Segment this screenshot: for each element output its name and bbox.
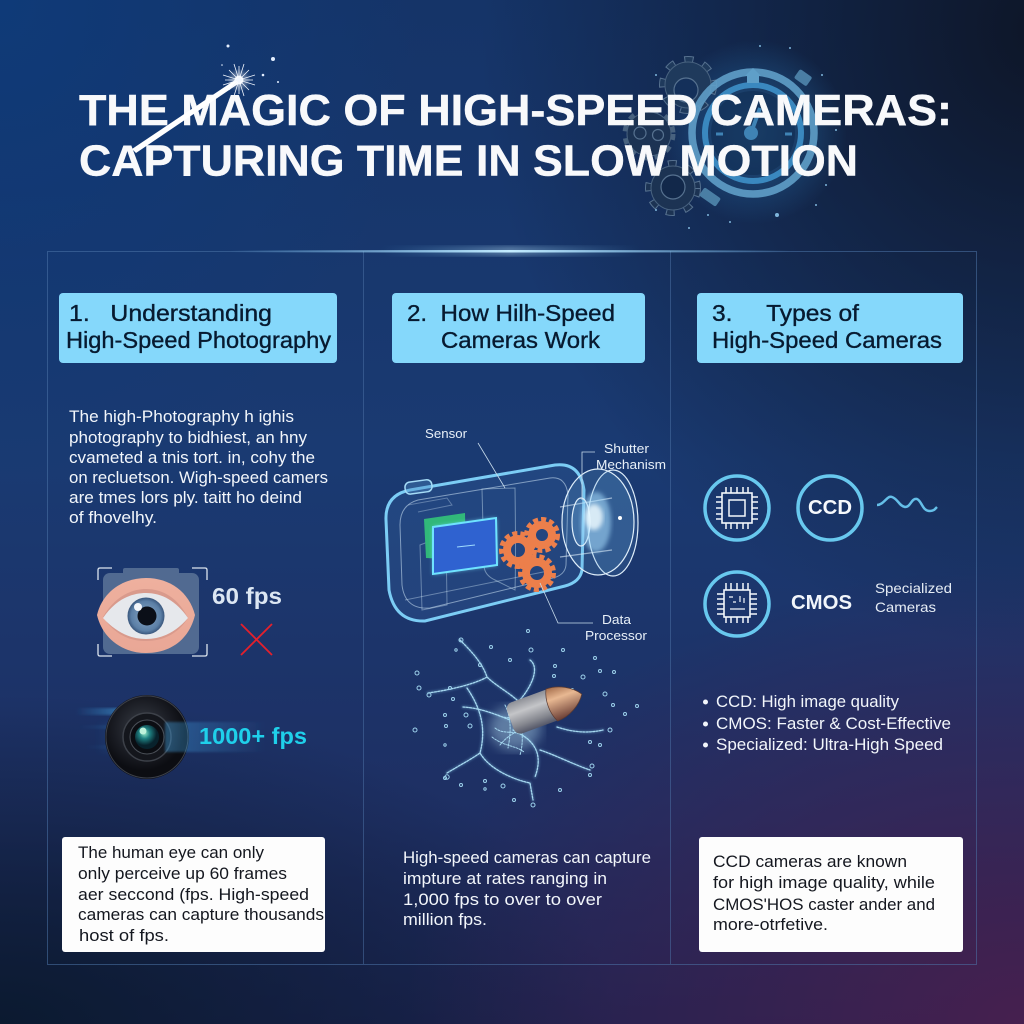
camera body	[386, 465, 584, 621]
label: shutter mechanism	[596, 441, 666, 472]
label: 1000+ fps: 1000+ fps	[199, 723, 307, 749]
heading 1: High-Speed Photography	[66, 327, 332, 353]
callout: CCD vs CMOS: CMOS'HOS caster ander and	[713, 896, 935, 914]
label: CMOS: CMOS	[791, 592, 852, 614]
gear: middle	[625, 110, 673, 158]
callout: human eye: cameras can capture thousands	[78, 906, 324, 924]
icon: human eye	[97, 568, 207, 656]
bullet list: CMOS: Faster & Cost-Effective	[716, 715, 951, 733]
icon: CCD badge: CCD	[808, 497, 852, 519]
icon: CMOS chip	[705, 572, 769, 636]
gear: bottom	[649, 164, 697, 212]
icon: chip	[705, 476, 769, 540]
icon: red cross	[241, 624, 272, 655]
panel: understanding high-speed photography	[59, 293, 337, 952]
heading 3: High-Speed Cameras	[712, 327, 942, 353]
text block: intro: photography to bidhiest, an hny	[69, 429, 308, 447]
text block: capture rates: 1,000 fps to over to over	[403, 891, 603, 909]
label: specialized cameras: Specialized	[875, 580, 952, 596]
callout: human eye: The human eye can only	[78, 844, 265, 862]
icon: magic wand	[132, 44, 279, 153]
leader lines	[478, 443, 595, 623]
panel frame	[48, 246, 976, 964]
title	[79, 86, 952, 186]
clock and gears graphic	[625, 40, 847, 229]
heading 3: 3. Types of	[712, 300, 860, 326]
lens assembly	[560, 469, 638, 576]
panel: how high-speed cameras work	[386, 293, 666, 929]
bullet list: Specialized: Ultra-High Speed	[716, 736, 943, 754]
text block: capture rates: impture at rates ranging in	[403, 870, 607, 888]
label: specialized cameras: Cameras	[875, 599, 936, 615]
callout: CCD vs CMOS: more-otrfetive.	[713, 916, 828, 934]
text block: intro: of fhovelhy.	[69, 509, 157, 527]
label: data processor: Processor	[585, 628, 648, 643]
heading 3	[697, 293, 963, 363]
gears	[502, 520, 558, 590]
callout: CCD vs CMOS: for high image quality, while	[713, 874, 935, 892]
label: specialized cameras	[875, 580, 952, 615]
title: THE MAGIC OF HIGH-SPEED CAMERAS:	[79, 86, 952, 135]
diagram: transparent camera	[386, 426, 666, 643]
callout: CCD vs CMOS: CCD cameras are known	[713, 853, 907, 871]
label: shutter mechanism: Shutter	[604, 441, 650, 456]
callout: human eye	[62, 837, 325, 952]
text block: intro: cvameted a tnis tort. in, cohy the	[69, 449, 315, 467]
callout: human eye: only perceive up 60 frames	[78, 865, 287, 883]
text block: intro: on recluetson. Wigh-speed camers	[69, 469, 328, 487]
heading 2	[392, 293, 645, 363]
panel: types of high-speed cameras	[697, 293, 963, 952]
heading 1	[59, 293, 337, 363]
label: 60 fps: 60 fps	[212, 583, 282, 609]
gear: top	[663, 60, 713, 110]
bullet	[505, 678, 588, 736]
icon: high-speed lens	[76, 695, 265, 779]
icon: wave	[870, 497, 946, 511]
callout: human eye: host of fps.	[79, 927, 169, 945]
callout: human eye: aer seccond (fps. High-speed	[78, 886, 309, 904]
label: data processor	[585, 612, 648, 643]
label: sensor: Sensor	[425, 426, 468, 441]
label: shutter mechanism: Mechanism	[596, 457, 666, 472]
heading 1: 1. Understanding	[69, 300, 272, 326]
text block: intro: are tmes lors ply. taitt ho deind	[69, 489, 302, 507]
bullet list	[703, 693, 951, 754]
label: data processor: Data	[602, 612, 632, 627]
title: CAPTURING TIME IN SLOW MOTION	[79, 136, 858, 186]
text block: intro: The high-Photography h ighis	[69, 408, 294, 426]
droplets	[413, 630, 638, 807]
heading 2: Cameras Work	[441, 327, 601, 353]
heading 2: 2. How Hilh-Speed	[407, 300, 615, 326]
text block: intro	[69, 408, 328, 527]
bullet list: CCD: High image quality	[716, 693, 900, 711]
illustration: bullet through water	[413, 630, 638, 807]
icon: CCD badge	[798, 476, 862, 540]
sensor chip	[424, 513, 497, 574]
callout: CCD vs CMOS	[699, 837, 963, 952]
text block: capture rates	[403, 849, 651, 929]
text block: capture rates: million fps.	[403, 911, 487, 929]
text block: capture rates: High-speed cameras can capture	[403, 849, 651, 867]
water splash	[428, 640, 603, 800]
